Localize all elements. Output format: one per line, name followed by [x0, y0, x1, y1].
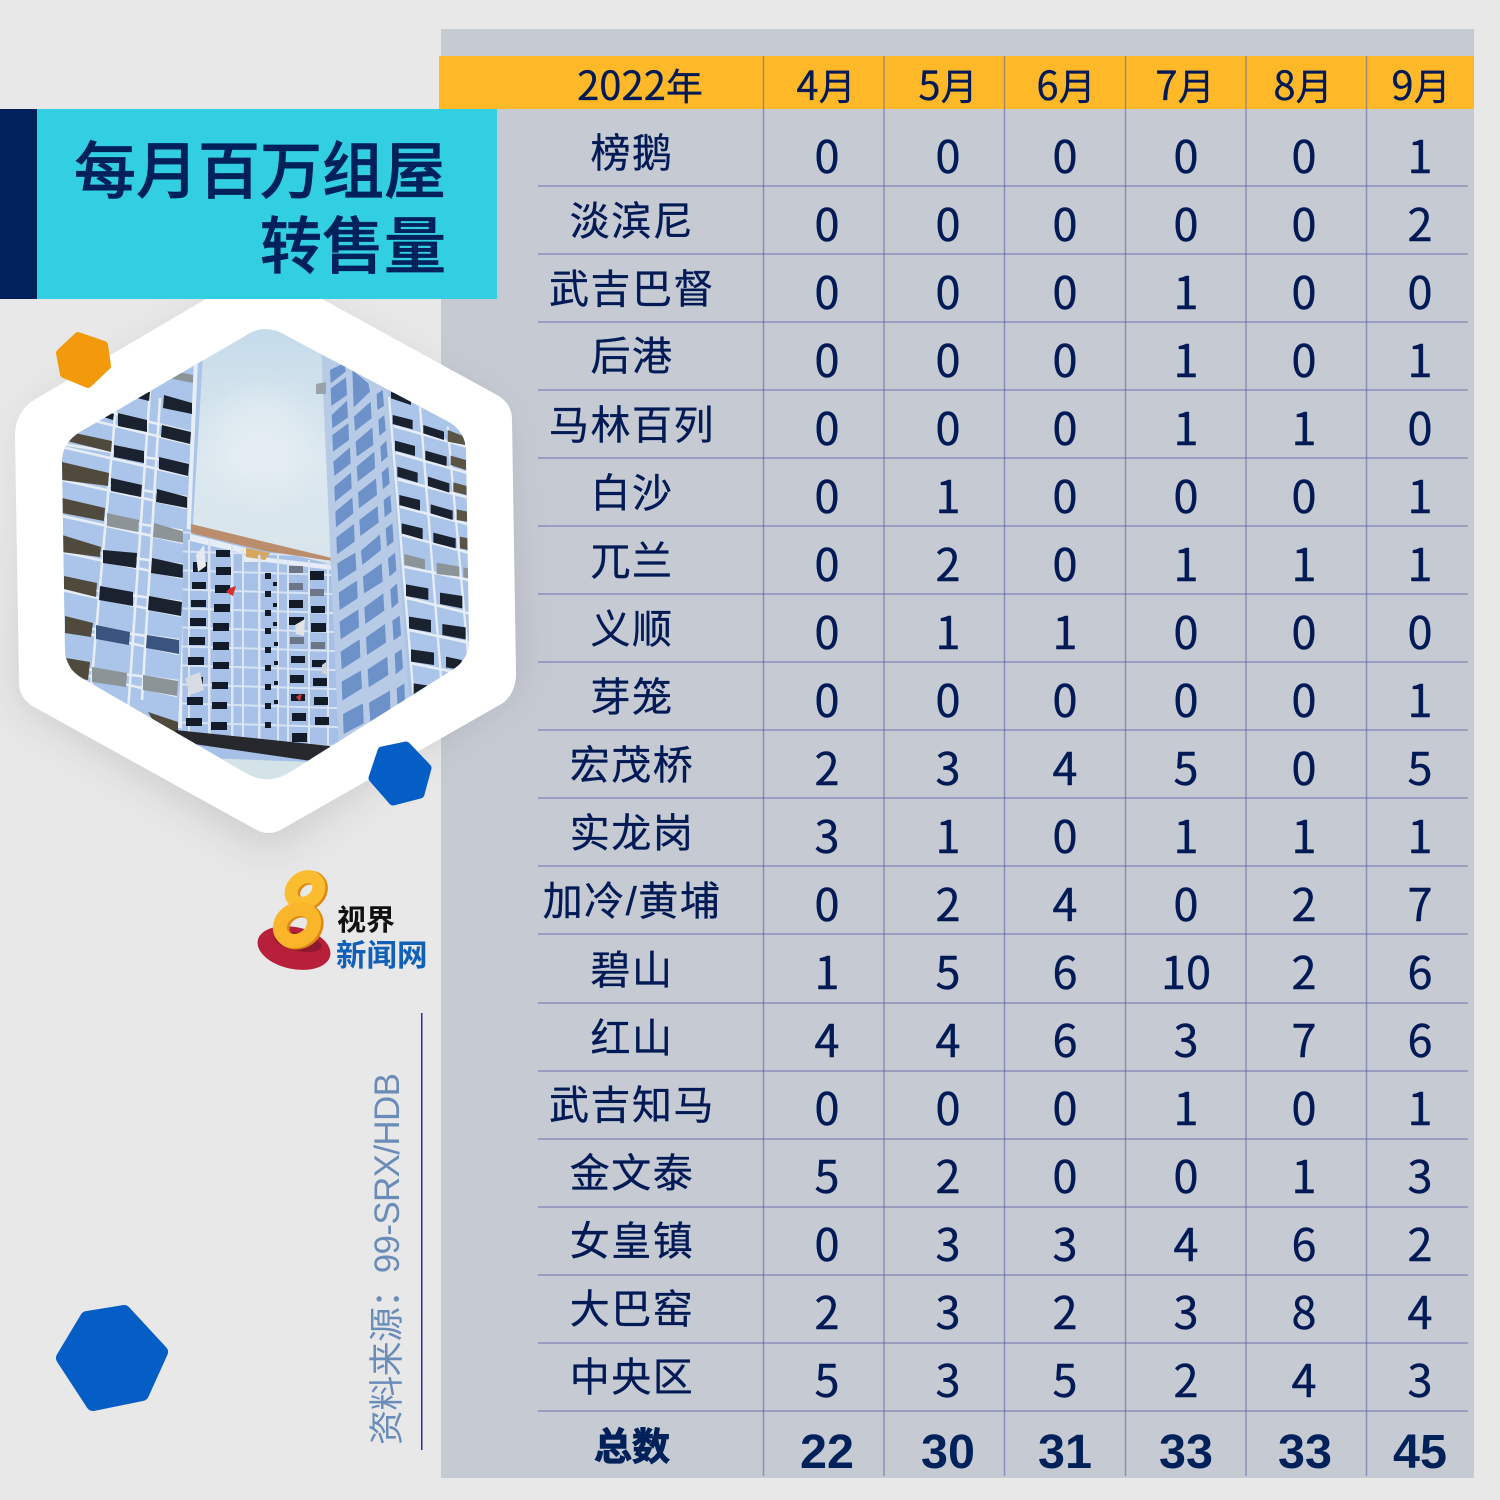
row: 加冷/黄埔: 4 — [1053, 869, 1077, 934]
row: 武吉巴督: 武吉巴督 — [549, 268, 715, 312]
row: 宏茂桥: 0 — [1292, 733, 1316, 798]
row: 宏茂桥 — [570, 733, 1432, 798]
row: 淡滨尼: 0 — [936, 189, 960, 254]
row: 红山: 6 — [1408, 1005, 1432, 1070]
row: 大巴窑: 8 — [1292, 1277, 1316, 1342]
centre block — [182, 524, 340, 770]
row: totals: 总数 — [594, 1427, 670, 1469]
title text: 每月百万组屋 — [74, 138, 446, 207]
row: 中央区: 3 — [936, 1345, 960, 1410]
row: 武吉知马: 武吉知马 — [549, 1084, 715, 1128]
row: 红山: 4 — [936, 1005, 960, 1070]
row: 武吉知马: 0 — [936, 1073, 960, 1138]
hexagon shadow — [19, 290, 516, 850]
row: 武吉知马: 0 — [1053, 1073, 1077, 1138]
row: 白沙 — [590, 461, 1432, 526]
row: 金文泰: 0 — [1174, 1141, 1198, 1206]
photo: HDB flats — [62, 329, 469, 780]
row: 白沙: 1 — [1408, 461, 1432, 526]
row: 宏茂桥: 4 — [1053, 733, 1077, 798]
row: 后港: 0 — [815, 325, 839, 390]
row: 芽笼 — [590, 665, 1432, 730]
row: totals: 33 — [1159, 1425, 1213, 1479]
row: 女皇镇: 3 — [936, 1209, 960, 1274]
logo: 8视界新闻网 — [253, 871, 428, 976]
row: 大巴窑: 大巴窑 — [570, 1288, 694, 1332]
row: 宏茂桥: 5 — [1408, 733, 1432, 798]
row: 兀兰: 0 — [815, 529, 839, 594]
row: 兀兰: 0 — [1053, 529, 1077, 594]
row: 武吉巴督: 0 — [815, 257, 839, 322]
title text: 转售量 — [260, 213, 446, 282]
row: 金文泰: 2 — [936, 1141, 960, 1206]
row: 后港: 1 — [1408, 325, 1432, 390]
title banner — [0, 109, 497, 299]
source divider line — [421, 1013, 422, 1450]
row: 义顺: 0 — [815, 597, 839, 662]
row: 马林百列: 0 — [1408, 393, 1432, 458]
logo: 8视界新闻网: 视界 — [337, 897, 395, 939]
row: 女皇镇: 4 — [1174, 1209, 1198, 1274]
row: 金文泰: 5 — [815, 1141, 839, 1206]
row: 兀兰: 1 — [1408, 529, 1432, 594]
row: 红山: 4 — [815, 1005, 839, 1070]
hexagon white frame — [15, 266, 516, 833]
row: 义顺: 1 — [1053, 597, 1077, 662]
row: 武吉巴督 — [549, 257, 1432, 322]
row: totals: 45 — [1393, 1425, 1447, 1479]
row: 白沙: 0 — [1292, 461, 1316, 526]
row: 后港: 0 — [1053, 325, 1077, 390]
row: 红山: 7 — [1292, 1005, 1316, 1070]
panel: table background — [441, 29, 1474, 1478]
table header bar: 6月 — [1036, 54, 1096, 112]
row: 宏茂桥: 宏茂桥 — [570, 744, 694, 788]
table header bar: 9月 — [1391, 54, 1451, 112]
row: 加冷/黄埔: 2 — [936, 869, 960, 934]
row: 女皇镇: 2 — [1408, 1209, 1432, 1274]
row: 红山: 3 — [1174, 1005, 1198, 1070]
row: 马林百列: 0 — [1053, 393, 1077, 458]
table header bar: 5月 — [918, 54, 978, 112]
row: 碧山: 10 — [1161, 937, 1211, 1002]
row: 碧山: 2 — [1292, 937, 1316, 1002]
row: 女皇镇: 6 — [1292, 1209, 1316, 1274]
ground — [222, 758, 306, 780]
row: 红山 — [590, 1005, 1432, 1070]
row: 红山: 6 — [1053, 1005, 1077, 1070]
row: 淡滨尼: 淡滨尼 — [570, 200, 694, 244]
row: 淡滨尼: 2 — [1408, 189, 1432, 254]
row: 后港: 后港 — [590, 335, 674, 379]
logo: 8视界新闻网: 新闻网 — [336, 931, 428, 975]
row: 红山: 红山 — [590, 1017, 674, 1061]
row: 淡滨尼 — [570, 189, 1432, 254]
row: 马林百列 — [549, 393, 1432, 458]
row: 碧山: 6 — [1053, 937, 1077, 1002]
row: 芽笼: 1 — [1408, 665, 1432, 730]
row: 芽笼: 0 — [1174, 665, 1198, 730]
row: 武吉知马: 1 — [1174, 1073, 1198, 1138]
row: 武吉巴督: 0 — [1408, 257, 1432, 322]
row: 宏茂桥: 2 — [815, 733, 839, 798]
row: 武吉巴督: 0 — [936, 257, 960, 322]
row: 碧山: 碧山 — [590, 949, 674, 993]
row: 中央区 — [570, 1345, 1432, 1410]
row: 实龙岗: 1 — [936, 801, 960, 866]
row: 女皇镇 — [570, 1209, 1432, 1274]
row: 中央区: 2 — [1174, 1345, 1198, 1410]
row: 大巴窑: 3 — [936, 1277, 960, 1342]
right block, left face — [316, 354, 409, 741]
row: 后港 — [590, 325, 1432, 390]
row: 中央区: 4 — [1292, 1345, 1316, 1410]
row: 榜鹅: 0 — [815, 121, 839, 186]
table header bar: 7月 — [1155, 54, 1215, 112]
row: 武吉巴督: 0 — [1053, 257, 1077, 322]
icon: orange hexagon — [60, 336, 107, 384]
row: 后港: 0 — [1292, 325, 1316, 390]
row: 淡滨尼: 0 — [1292, 189, 1316, 254]
row: 加冷/黄埔: 2 — [1292, 869, 1316, 934]
row: 实龙岗: 0 — [1053, 801, 1077, 866]
row: 兀兰: 兀兰 — [590, 540, 674, 584]
row: 榜鹅: 1 — [1408, 121, 1432, 186]
row: totals: 33 — [1278, 1425, 1332, 1479]
row: 榜鹅: 榜鹅 — [590, 132, 674, 176]
row: totals: 31 — [1038, 1425, 1092, 1479]
row: 碧山 — [590, 937, 1432, 1002]
icon: large blue hexagon — [63, 1312, 161, 1404]
row: 白沙: 0 — [1053, 461, 1077, 526]
table header bar — [439, 54, 1474, 112]
row: 金文泰: 3 — [1408, 1141, 1432, 1206]
row: 女皇镇: 3 — [1053, 1209, 1077, 1274]
row: 碧山: 1 — [815, 937, 839, 1002]
row: 大巴窑: 2 — [815, 1277, 839, 1342]
row: 淡滨尼: 0 — [815, 189, 839, 254]
row: 大巴窑: 3 — [1174, 1277, 1198, 1342]
row: 实龙岗: 3 — [815, 801, 839, 866]
row: 榜鹅 — [590, 121, 1432, 186]
row: 大巴窑: 2 — [1053, 1277, 1077, 1342]
row: totals: 30 — [921, 1425, 975, 1479]
row: 碧山: 6 — [1408, 937, 1432, 1002]
table grid lines — [538, 56, 1468, 1476]
row: 义顺: 义顺 — [590, 608, 674, 652]
row: 兀兰: 1 — [1174, 529, 1198, 594]
icon: blue hexagon — [373, 746, 427, 801]
row: 加冷/黄埔: 0 — [815, 869, 839, 934]
row: 加冷/黄埔: 7 — [1408, 869, 1432, 934]
row: 实龙岗 — [570, 801, 1432, 866]
row: 女皇镇: 女皇镇 — [570, 1220, 694, 1264]
row: 榜鹅: 0 — [936, 121, 960, 186]
row: 中央区: 5 — [815, 1345, 839, 1410]
row: 后港: 0 — [936, 325, 960, 390]
row: 芽笼: 芽笼 — [590, 676, 674, 720]
row: 金文泰: 金文泰 — [570, 1152, 694, 1196]
row: 芽笼: 0 — [1292, 665, 1316, 730]
canopy — [175, 730, 330, 762]
row: 义顺 — [590, 597, 1432, 662]
row: 兀兰: 1 — [1292, 529, 1316, 594]
row: 加冷/黄埔 — [543, 869, 1432, 934]
row: 榜鹅: 0 — [1053, 121, 1077, 186]
row: 武吉知马: 0 — [815, 1073, 839, 1138]
row: 芽笼: 0 — [1053, 665, 1077, 730]
table header bar: 2022年 — [577, 54, 703, 112]
row: 义顺: 0 — [1174, 597, 1198, 662]
row: 加冷/黄埔: 0 — [1174, 869, 1198, 934]
row: 兀兰: 2 — [936, 529, 960, 594]
row: 后港: 1 — [1174, 325, 1198, 390]
row: 榜鹅: 0 — [1174, 121, 1198, 186]
row: 宏茂桥: 5 — [1174, 733, 1198, 798]
row: 实龙岗: 1 — [1408, 801, 1432, 866]
row: 武吉巴督: 1 — [1174, 257, 1198, 322]
row: 芽笼: 0 — [936, 665, 960, 730]
table rows — [543, 121, 1447, 1479]
row: 中央区: 3 — [1408, 1345, 1432, 1410]
row: 马林百列: 1 — [1292, 393, 1316, 458]
row: 武吉知马: 1 — [1408, 1073, 1432, 1138]
row: 榜鹅: 0 — [1292, 121, 1316, 186]
row: 义顺: 0 — [1408, 597, 1432, 662]
row: 义顺: 1 — [936, 597, 960, 662]
source text: 资料来源：99-SRX/HDB — [368, 1073, 407, 1445]
row: 女皇镇: 0 — [815, 1209, 839, 1274]
row: 武吉巴督: 0 — [1292, 257, 1316, 322]
row: 实龙岗: 1 — [1292, 801, 1316, 866]
left block — [62, 360, 203, 735]
row: 碧山: 5 — [936, 937, 960, 1002]
row: 白沙: 0 — [815, 461, 839, 526]
row: 淡滨尼: 0 — [1174, 189, 1198, 254]
row: 马林百列: 0 — [936, 393, 960, 458]
row: 金文泰: 1 — [1292, 1141, 1316, 1206]
table header bar: 4月 — [796, 54, 856, 112]
row: 芽笼: 0 — [815, 665, 839, 730]
row: 义顺: 0 — [1292, 597, 1316, 662]
row: 大巴窑: 4 — [1408, 1277, 1432, 1342]
row: 马林百列: 0 — [815, 393, 839, 458]
row: 宏茂桥: 3 — [936, 733, 960, 798]
row: 武吉知马 — [549, 1073, 1432, 1138]
row: 白沙: 1 — [936, 461, 960, 526]
table header bar: 8月 — [1273, 54, 1333, 112]
row: 中央区: 5 — [1053, 1345, 1077, 1410]
row: 大巴窑 — [570, 1277, 1432, 1342]
row: 加冷/黄埔: 加冷/黄埔 — [543, 880, 721, 924]
right block, right face — [388, 390, 469, 697]
row: 马林百列: 马林百列 — [549, 404, 715, 448]
row: 实龙岗: 实龙岗 — [570, 812, 694, 856]
row: 武吉知马: 0 — [1292, 1073, 1316, 1138]
row: 金文泰: 0 — [1053, 1141, 1077, 1206]
row: 白沙: 0 — [1174, 461, 1198, 526]
row: 实龙岗: 1 — [1174, 801, 1198, 866]
row: 马林百列: 1 — [1174, 393, 1198, 458]
row: 金文泰 — [570, 1141, 1432, 1206]
row: 兀兰 — [590, 529, 1432, 594]
row: totals: 22 — [800, 1425, 854, 1479]
row: 淡滨尼: 0 — [1053, 189, 1077, 254]
row: totals — [594, 1425, 1447, 1479]
row: 中央区: 中央区 — [570, 1356, 694, 1400]
row: 白沙: 白沙 — [590, 472, 674, 516]
